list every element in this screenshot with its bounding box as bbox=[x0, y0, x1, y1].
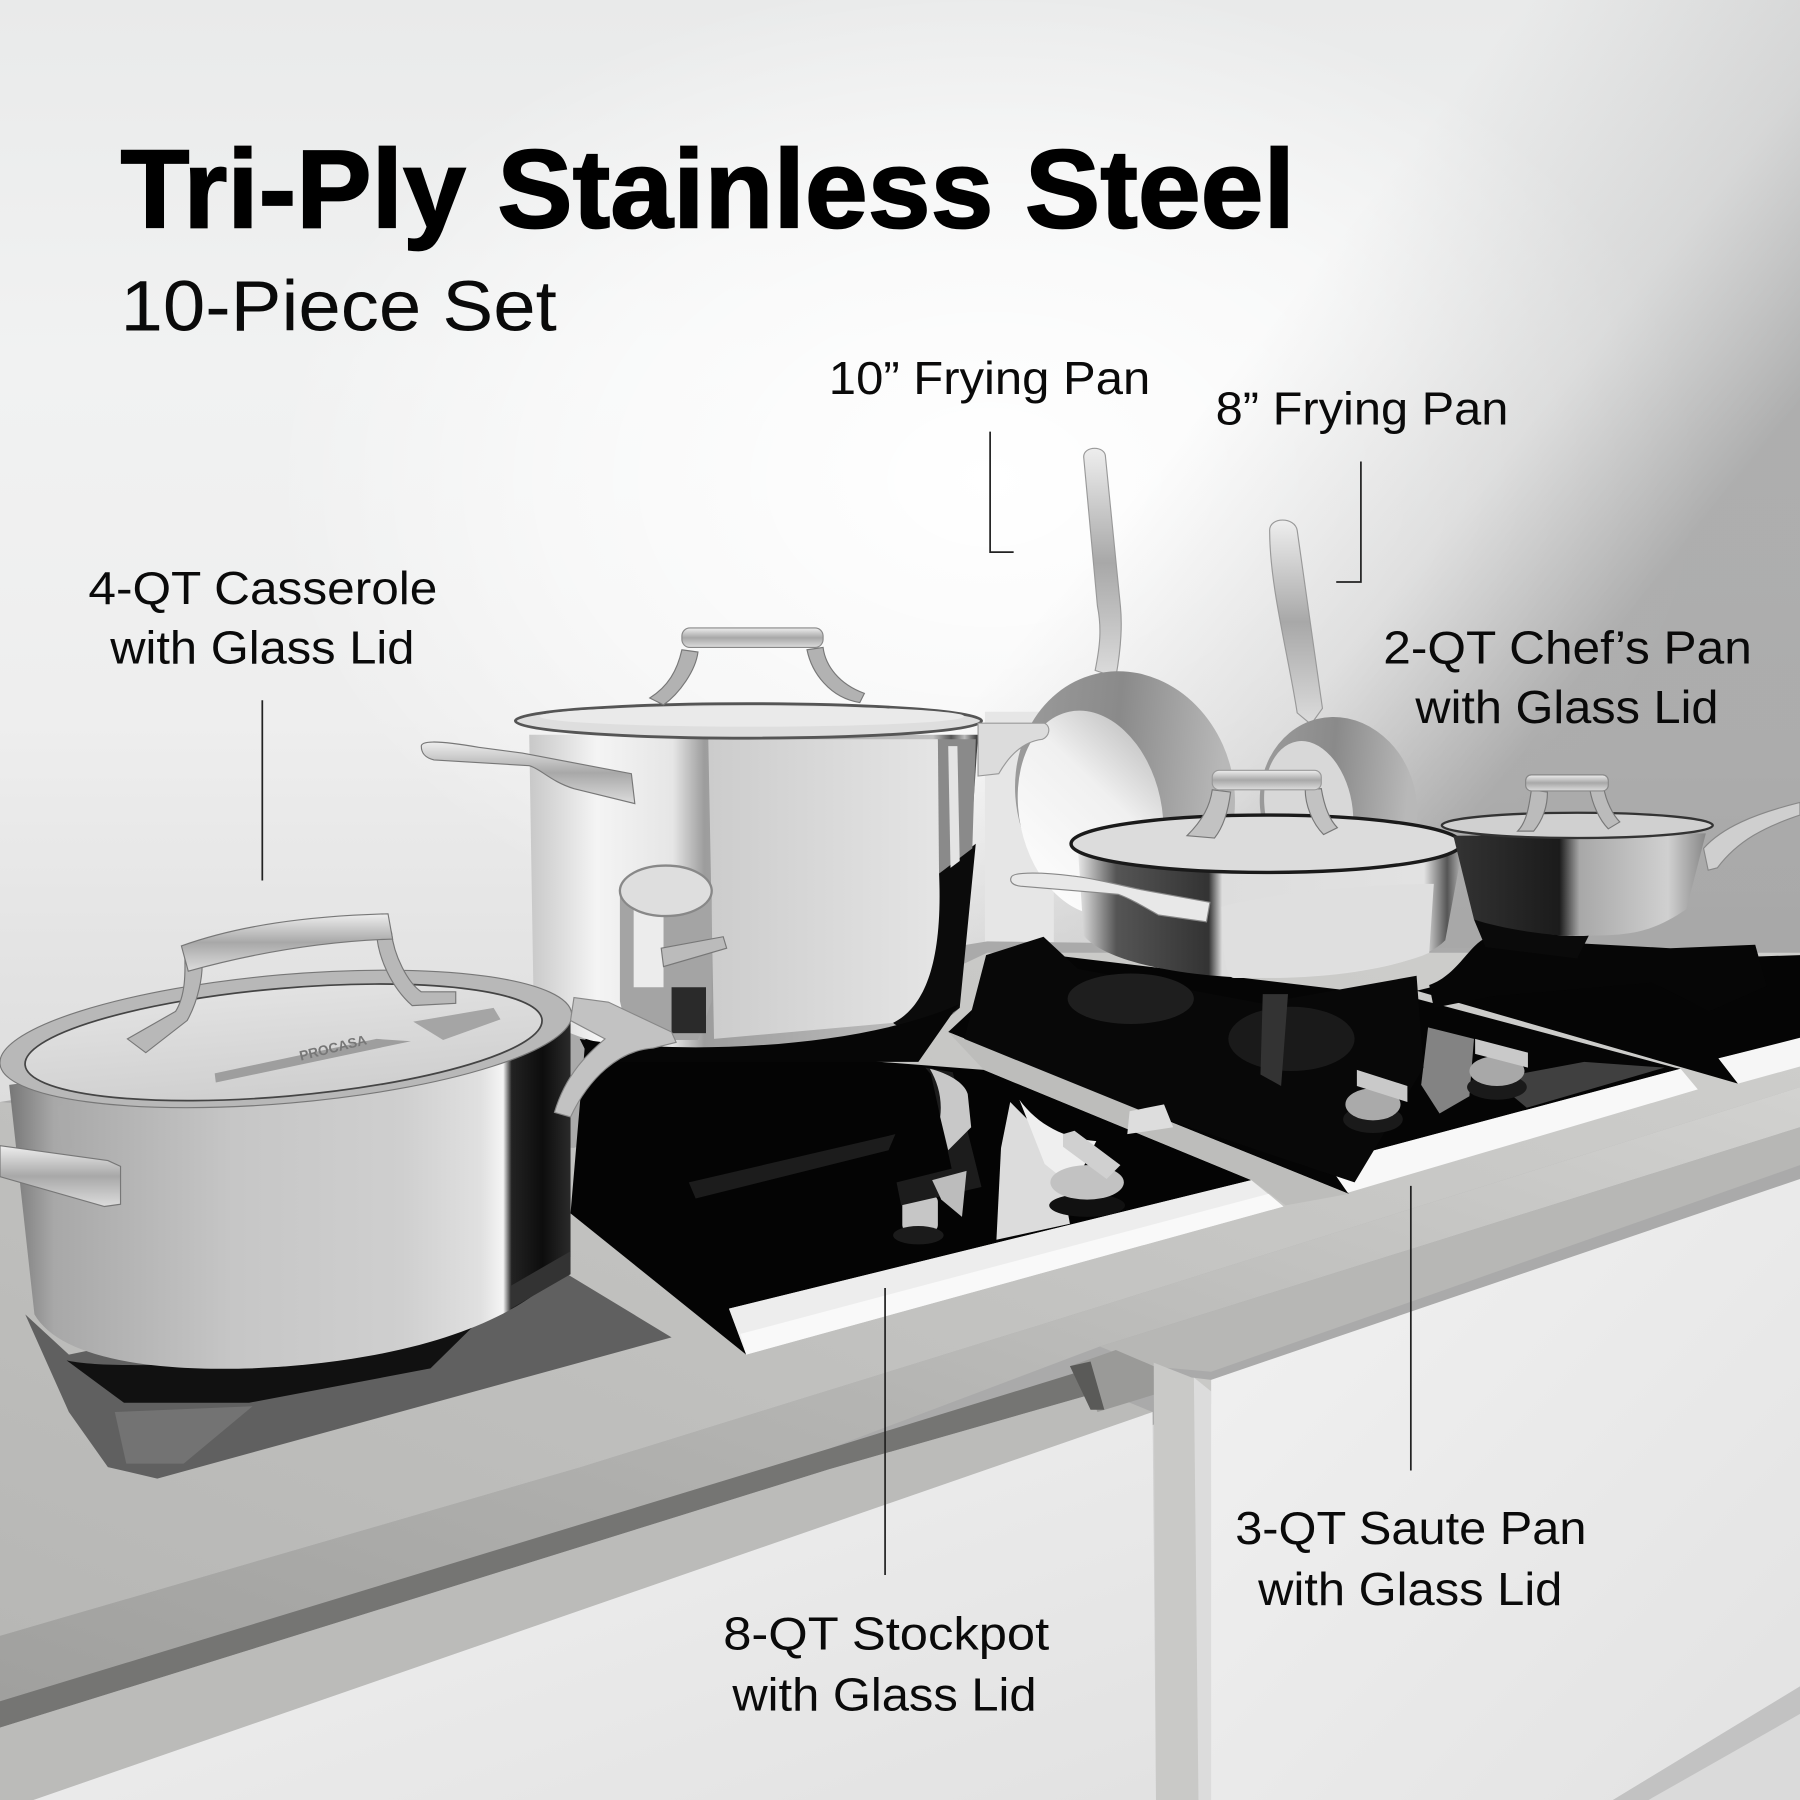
3-QT saute pan bbox=[1011, 770, 1492, 978]
left handle bbox=[421, 742, 635, 804]
2-QT chef's pan bbox=[1442, 775, 1800, 959]
round dial bbox=[893, 1195, 944, 1244]
side handle bbox=[1011, 873, 1210, 922]
label: 8-QT stockpot bbox=[723, 1288, 1049, 1720]
cooktop: right burner bbox=[1417, 955, 1800, 1084]
label: 4-QT casserole bbox=[88, 562, 437, 880]
label: 10-inch frying pan: 10” Frying Pan bbox=[829, 352, 1150, 404]
lid handle bbox=[1518, 788, 1620, 831]
dark chrome edge bbox=[893, 844, 976, 1028]
label: 2-QT chef's pan: with Glass Lid bbox=[1414, 681, 1718, 733]
label: 3-QT saute pan bbox=[1235, 1186, 1586, 1615]
burner grates bbox=[964, 937, 1767, 1182]
reflected pot bbox=[620, 866, 727, 1040]
label: 8-inch frying pan bbox=[1216, 383, 1508, 582]
long handle bbox=[1704, 802, 1800, 870]
right control knob bbox=[1467, 1039, 1528, 1100]
cabinet post bbox=[1154, 1363, 1211, 1800]
label: 4-QT casserole: 4-QT Casserole bbox=[88, 562, 437, 614]
cooktop: front burner bbox=[571, 1032, 1349, 1355]
reflected bowl bbox=[1024, 1039, 1134, 1096]
lid handle bbox=[650, 647, 864, 705]
lid bbox=[1442, 813, 1713, 838]
middle control knob bbox=[1343, 1070, 1407, 1133]
label: 3-QT saute pan: 3-QT Saute Pan bbox=[1235, 1502, 1586, 1554]
8-inch frying pan bbox=[1241, 520, 1436, 912]
label: 2-QT chef's pan bbox=[1383, 622, 1752, 733]
label: 3-QT saute pan: with Glass Lid bbox=[1257, 1563, 1562, 1615]
counter front edge bbox=[0, 1087, 1800, 1701]
10-inch frying pan bbox=[989, 448, 1261, 941]
label: 8-QT stockpot: with Glass Lid bbox=[731, 1668, 1037, 1720]
4-QT casserole bbox=[0, 914, 676, 1369]
cooktop: middle burner bbox=[948, 953, 1698, 1194]
glass reflection bbox=[932, 1171, 967, 1217]
pot holder mat bbox=[25, 1272, 672, 1479]
cabinet lower door bbox=[1648, 1714, 1800, 1800]
lid handle bbox=[1187, 789, 1337, 838]
label: 8-inch frying pan: 8” Frying Pan bbox=[1216, 383, 1508, 435]
right handle bbox=[978, 723, 1049, 776]
title: Tri-Ply Stainless Steel bbox=[121, 126, 1295, 251]
control knob bbox=[1049, 1131, 1125, 1217]
lid bbox=[515, 704, 982, 738]
cabinet handle bbox=[1070, 1350, 1154, 1412]
8-QT stockpot bbox=[421, 628, 1049, 1062]
chrome reflection bbox=[511, 1251, 571, 1309]
grate window bbox=[930, 1069, 971, 1150]
label: 2-QT chef's pan: 2-QT Chef’s Pan bbox=[1383, 622, 1752, 674]
lid: PROCASA bbox=[298, 1032, 368, 1064]
shadow groove bbox=[0, 1372, 1102, 1728]
cabinet door right bbox=[1211, 1179, 1800, 1800]
lid handle bbox=[127, 932, 456, 1053]
cabinet door left bbox=[33, 1412, 1156, 1800]
reflective glass bbox=[996, 1102, 1070, 1240]
countertop surface bbox=[0, 953, 1800, 1636]
lid bbox=[0, 950, 577, 1128]
lid bbox=[1071, 815, 1461, 872]
base shadow bbox=[580, 1004, 959, 1062]
right handle bbox=[554, 998, 676, 1117]
label: 4-QT casserole: with Glass Lid bbox=[109, 622, 414, 674]
label: 8-QT stockpot: 8-QT Stockpot bbox=[723, 1608, 1049, 1660]
counter strip between cooktops bbox=[948, 1032, 1349, 1205]
body highlight bbox=[708, 739, 951, 1039]
left handle bbox=[0, 1146, 121, 1207]
front trim bbox=[729, 1180, 1283, 1355]
subtitle: 10-Piece Set bbox=[121, 268, 557, 347]
grate frame bbox=[689, 1068, 982, 1205]
kitchen counter and cabinets bbox=[0, 941, 1800, 1800]
label: 10-inch frying pan bbox=[829, 352, 1150, 552]
